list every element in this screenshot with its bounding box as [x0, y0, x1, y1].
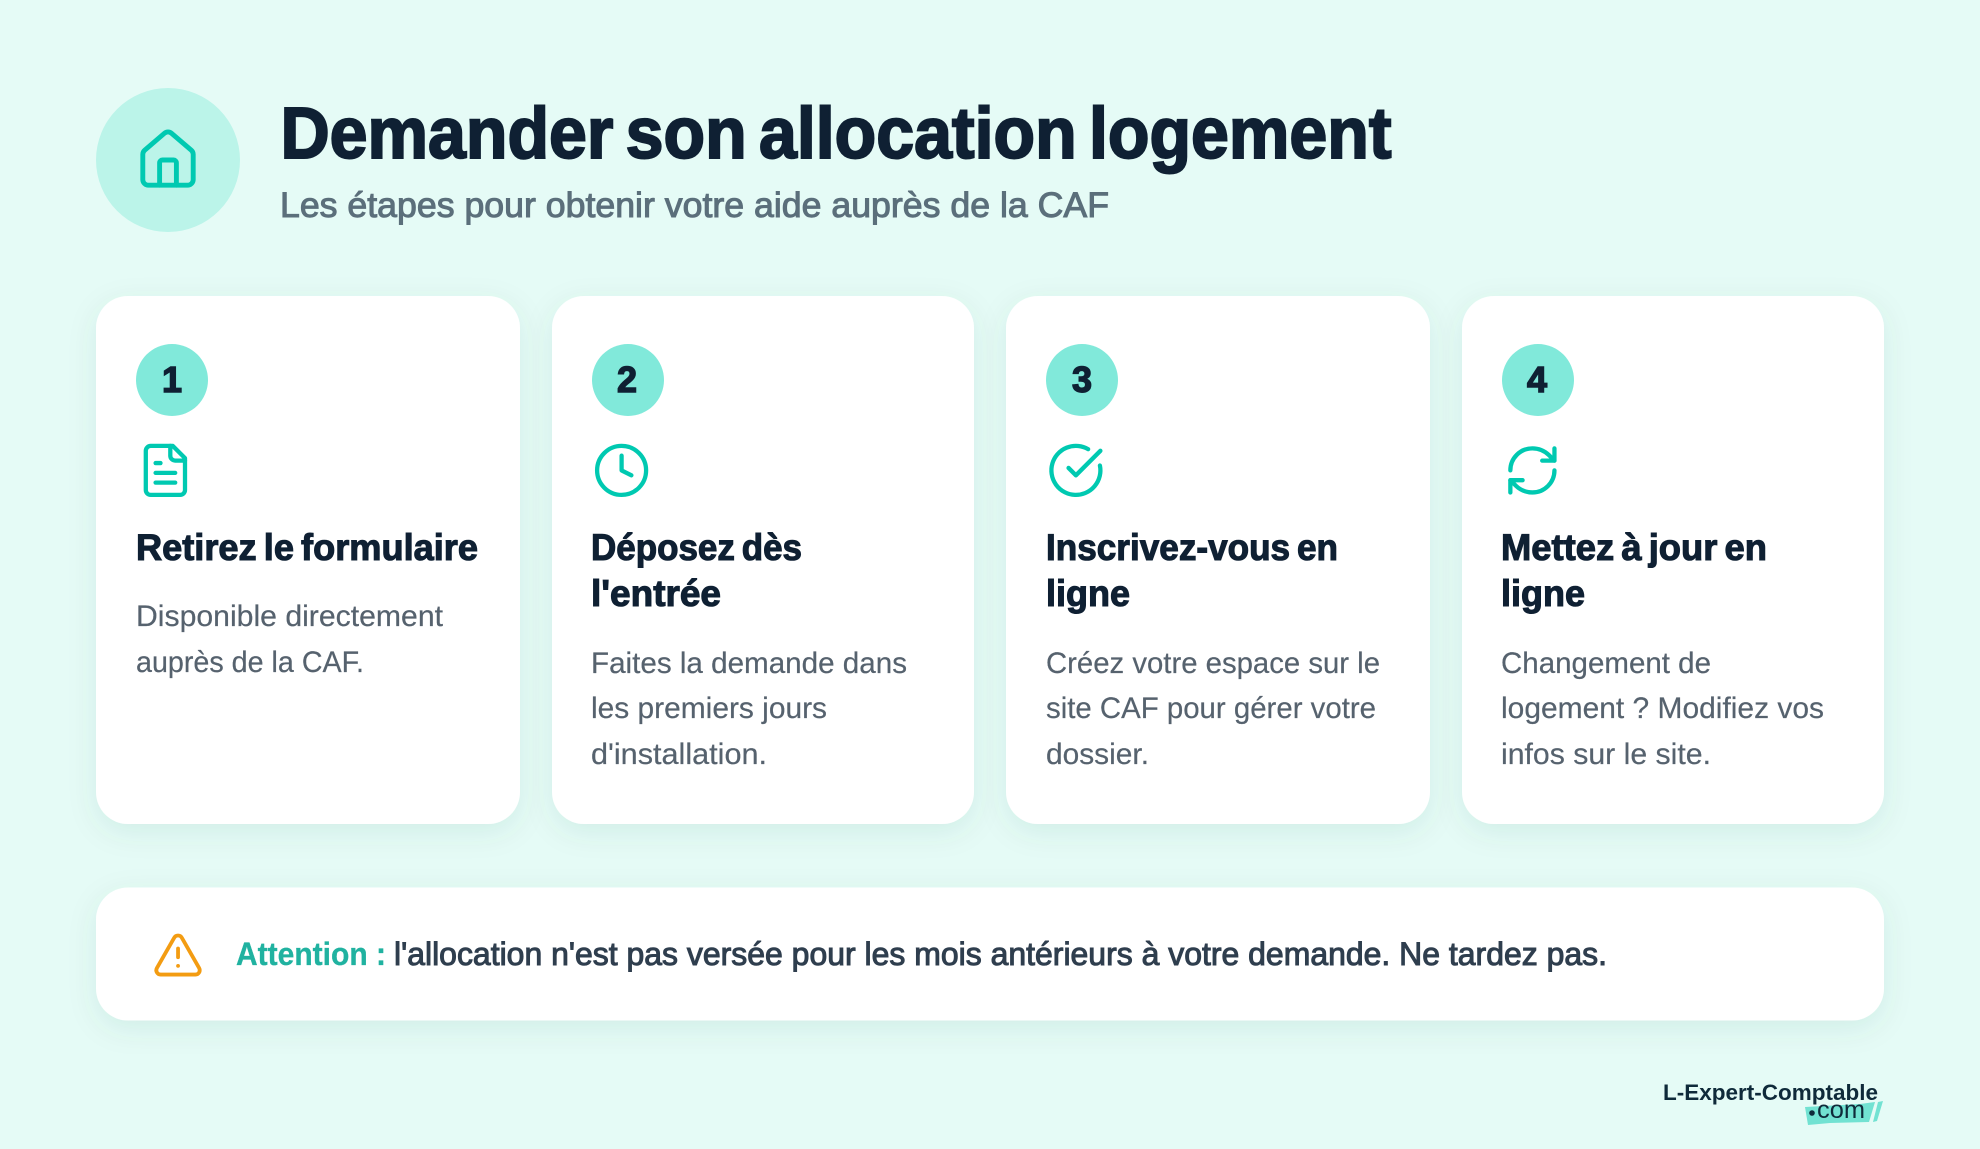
step 4 heading: [1501, 527, 1767, 614]
icon: warning triangle: [156, 935, 200, 975]
step 2 description: les premiers jours: [591, 692, 827, 725]
title: Demander son allocation logement: [280, 94, 1392, 174]
step 2 description: d'installation.: [591, 738, 767, 771]
panel: step 4: [1462, 296, 1884, 824]
step 3 description: dossier.: [1046, 738, 1149, 771]
step 4 description: Changement de: [1501, 647, 1711, 680]
step 4 heading: Mettez à jour en: [1501, 527, 1767, 568]
step 1 description: [136, 600, 444, 679]
panel: step 2: [552, 296, 974, 824]
step 3 heading: ligne: [1046, 573, 1130, 614]
step number 1: [136, 344, 208, 416]
step number 3: 3: [1072, 359, 1092, 400]
step 3 heading: [1046, 527, 1338, 614]
step 2 heading: l'entrée: [591, 573, 721, 614]
step 2 description: [591, 647, 907, 771]
step number 3: [1046, 344, 1118, 416]
icon: check circle: [1051, 446, 1100, 495]
logo: L-Expert-Comptable: [1663, 1080, 1878, 1105]
step 2 description: Faites la demande dans: [591, 647, 907, 680]
step 4 heading: ligne: [1501, 573, 1585, 614]
step 2 heading: [591, 527, 802, 614]
step number 4: 4: [1527, 359, 1547, 400]
logo: com: [1817, 1096, 1865, 1124]
step 4 description: infos sur le site.: [1501, 738, 1711, 771]
icon: refresh: [1510, 448, 1554, 492]
step number 4: [1502, 344, 1574, 416]
step 2 heading: Déposez dès: [591, 527, 802, 568]
icon: document: [146, 446, 185, 495]
step number 2: 2: [617, 359, 637, 400]
panel: step 3: [1006, 296, 1430, 824]
step 3 description: Créez votre espace sur le: [1046, 647, 1380, 680]
step number 2: [592, 344, 664, 416]
warning label: Attention :: [236, 936, 386, 972]
warning text: l'allocation n'est pas versée pour les mois antérieurs à votre demande. Ne tardez pas.: [394, 936, 1607, 972]
step 1 description: Disponible directement: [136, 600, 444, 633]
icon: clock: [597, 446, 646, 495]
step 3 heading: Inscrivez-vous en: [1046, 527, 1338, 568]
step 4 description: logement ? Modifiez vos: [1501, 692, 1824, 725]
panel: step 1: [96, 296, 520, 824]
step number 1: 1: [162, 359, 182, 400]
header icon: house: [96, 88, 240, 232]
step 3 description: [1046, 647, 1380, 771]
logo: [1663, 1080, 1883, 1125]
step 1 heading: Retirez le formulaire: [136, 527, 478, 568]
step 1 description: auprès de la CAF.: [136, 646, 364, 679]
step 3 description: site CAF pour gérer votre: [1046, 692, 1376, 725]
panel: warning callout: [96, 888, 1884, 1020]
step 4 description: [1501, 647, 1824, 771]
subtitle: Les étapes pour obtenir votre aide auprès de la CAF: [280, 186, 1109, 225]
